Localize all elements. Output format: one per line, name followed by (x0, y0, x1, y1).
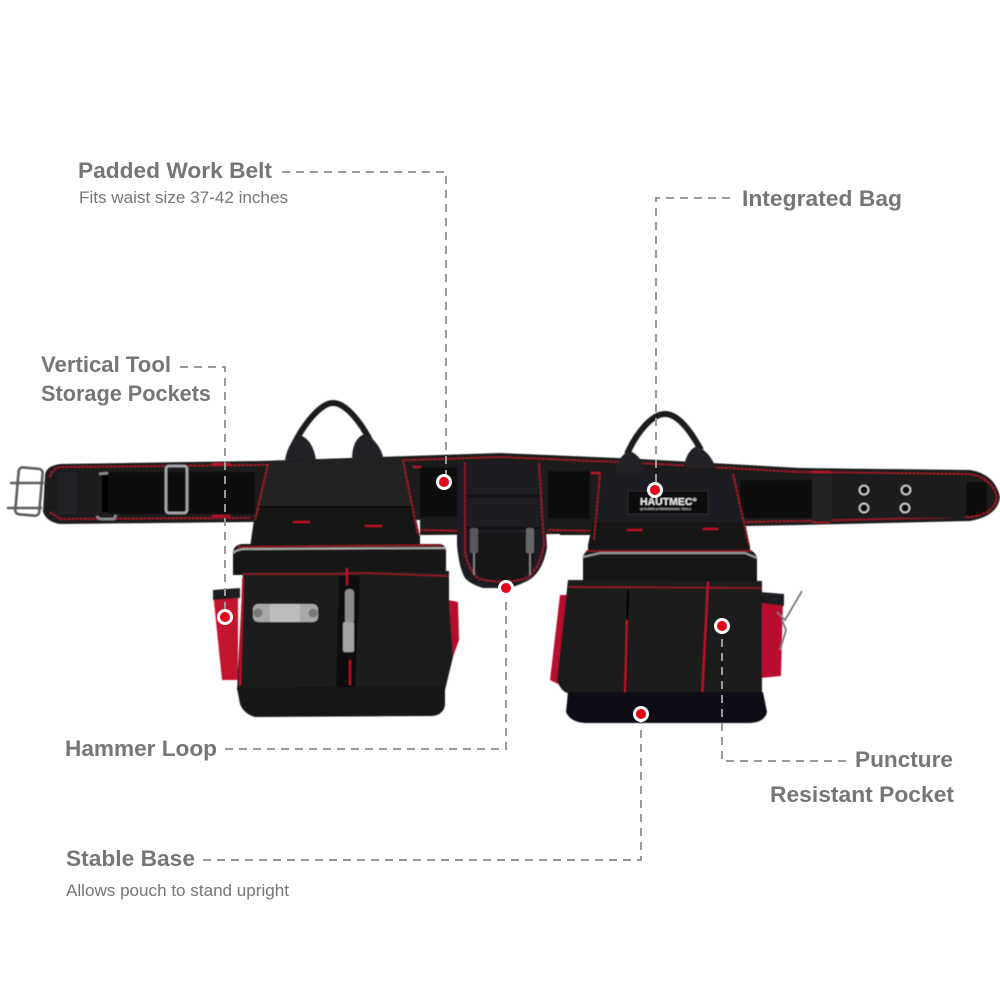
left pocket rim with reflective strip (233, 544, 446, 575)
leader: puncture resistant pocket (722, 634, 846, 761)
label: hammer loop: Hammer Loop (65, 736, 217, 761)
marker: stable base (634, 708, 648, 720)
wire hook (777, 591, 802, 650)
right pouch base (566, 692, 767, 723)
belt pad panel with eyelets (812, 474, 965, 522)
label: puncture resistant pocket: Puncture (855, 747, 953, 772)
brand label: HAUTMEC° (640, 496, 697, 508)
marker: padded belt (438, 476, 450, 488)
right pouch (550, 414, 802, 723)
left pouch upper flap (250, 458, 420, 548)
marker: vertical pockets (218, 610, 232, 624)
label: integrated bag: Integrated Bag (742, 186, 902, 211)
leader: vertical tool storage pockets (180, 367, 225, 610)
label: puncture resistant pocket (770, 747, 955, 807)
label: padded work belt: Padded Work Belt (78, 158, 273, 183)
label: vertical tool storage pockets: Vertical Tool (41, 352, 171, 377)
left bracket plate (253, 604, 318, 622)
left pouch handle (285, 403, 384, 460)
left red side pockets (213, 588, 459, 680)
left pocket body (237, 571, 453, 690)
left pouch base (237, 686, 445, 717)
leader: padded work belt (282, 172, 446, 475)
belt webbing strips (58, 467, 987, 519)
label: padded work belt (78, 158, 288, 207)
brand label: QUALIFIED & PROFESSIONAL TOOLS (640, 507, 691, 511)
brand label (628, 491, 708, 514)
right pocket body (557, 580, 762, 693)
label: puncture resistant pocket: Resistant Pocket (770, 782, 955, 807)
marker: hammer loop (500, 582, 512, 594)
roller buckle (7, 467, 44, 516)
centre pouch hanging pocket (457, 463, 547, 588)
tool belt product illustration (7, 403, 1000, 723)
label: stable base: Stable Base (66, 846, 195, 871)
centre clip left (470, 528, 478, 553)
leader: stable base (203, 722, 641, 860)
left pouch (213, 403, 459, 717)
label: vertical tool storage pockets: Storage Pockets (41, 381, 211, 406)
right pouch handle (615, 414, 716, 473)
marker: integrated bag (648, 484, 662, 496)
label: stable base (66, 846, 289, 900)
right pouch upper flap (588, 473, 750, 555)
belt keeper strap (58, 472, 116, 519)
marker: puncture pocket (716, 620, 728, 632)
centre clip right (526, 528, 534, 553)
right red side pockets (550, 592, 784, 685)
padded belt (7, 453, 1000, 535)
label: vertical tool storage pockets (41, 352, 211, 406)
leader: integrated bag (656, 198, 730, 482)
left clip (343, 589, 354, 652)
leader: hammer loop (225, 596, 506, 749)
label: padded work belt: Fits waist size 37-42 inches (79, 189, 288, 207)
belt stitching (50, 457, 997, 522)
sliding belt loop (166, 466, 187, 513)
label: stable base: Allows pouch to stand upright (66, 882, 289, 900)
right pocket rim with reflective strip (583, 549, 757, 582)
